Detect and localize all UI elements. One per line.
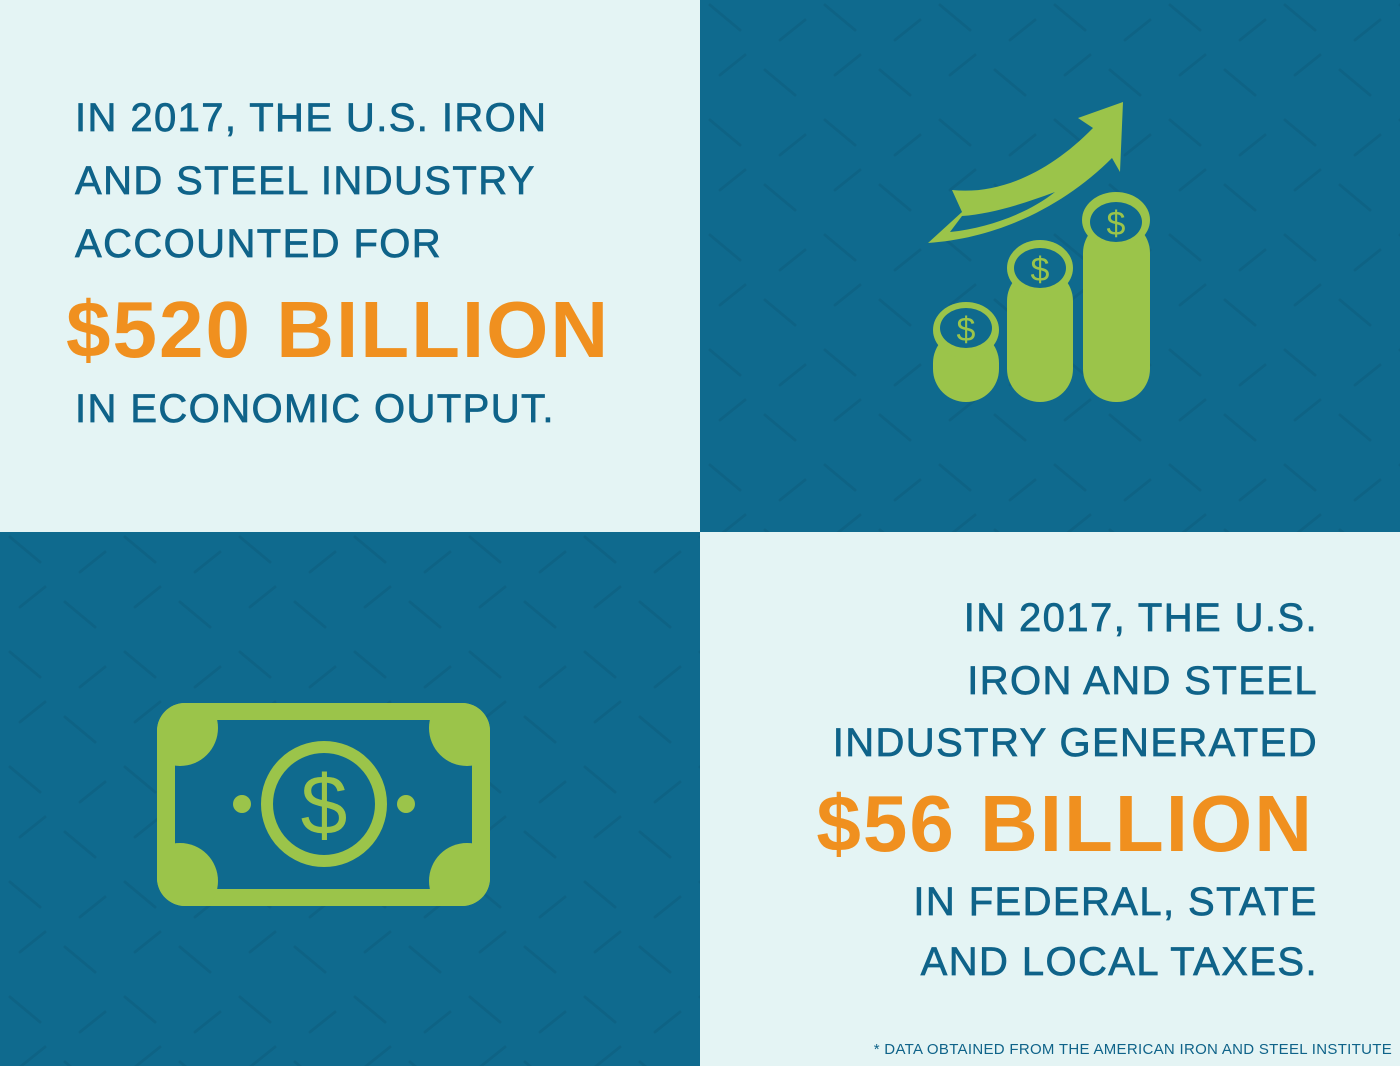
panel: top-right icon: $: [957, 311, 976, 349]
icon: dollar bill: $: [301, 758, 347, 852]
text: taxes line 1: IN FEDERAL, STATE: [913, 880, 1318, 924]
text: line 3: ACCOUNTED FOR: [75, 222, 442, 266]
panel: top-left text: [0, 0, 700, 532]
text: taxes line 2: AND LOCAL TAXES.: [921, 940, 1318, 984]
text: line 2: AND STEEL INDUSTRY: [75, 159, 536, 203]
heading: $56 billion: $56 BILLION: [816, 779, 1314, 868]
text: intro: IN 2017, THE U.S. IRON: [75, 96, 547, 140]
text: line 3 right: INDUSTRY GENERATED: [833, 721, 1318, 765]
icon: dollar bill: [157, 703, 490, 906]
text: economic output: IN ECONOMIC OUTPUT.: [75, 387, 555, 431]
footnote: * DATA OBTAINED FROM THE AMERICAN IRON AND STEEL INSTITUTE: [874, 1041, 1392, 1058]
panel: bottom-right text: [700, 532, 1400, 1066]
icon: growth arrow and coins: [928, 102, 1150, 402]
text: intro right: IN 2017, THE U.S.: [964, 596, 1318, 640]
panel: top-right icon: $: [1031, 251, 1050, 289]
panel: bottom-left icon: [0, 532, 700, 1066]
panel: top-right icon: $: [1107, 205, 1126, 243]
panel: top-right icon: [700, 0, 1400, 532]
heading: $520 billion: $520 BILLION: [66, 285, 610, 374]
text: line 2 right: IRON AND STEEL: [967, 659, 1318, 703]
